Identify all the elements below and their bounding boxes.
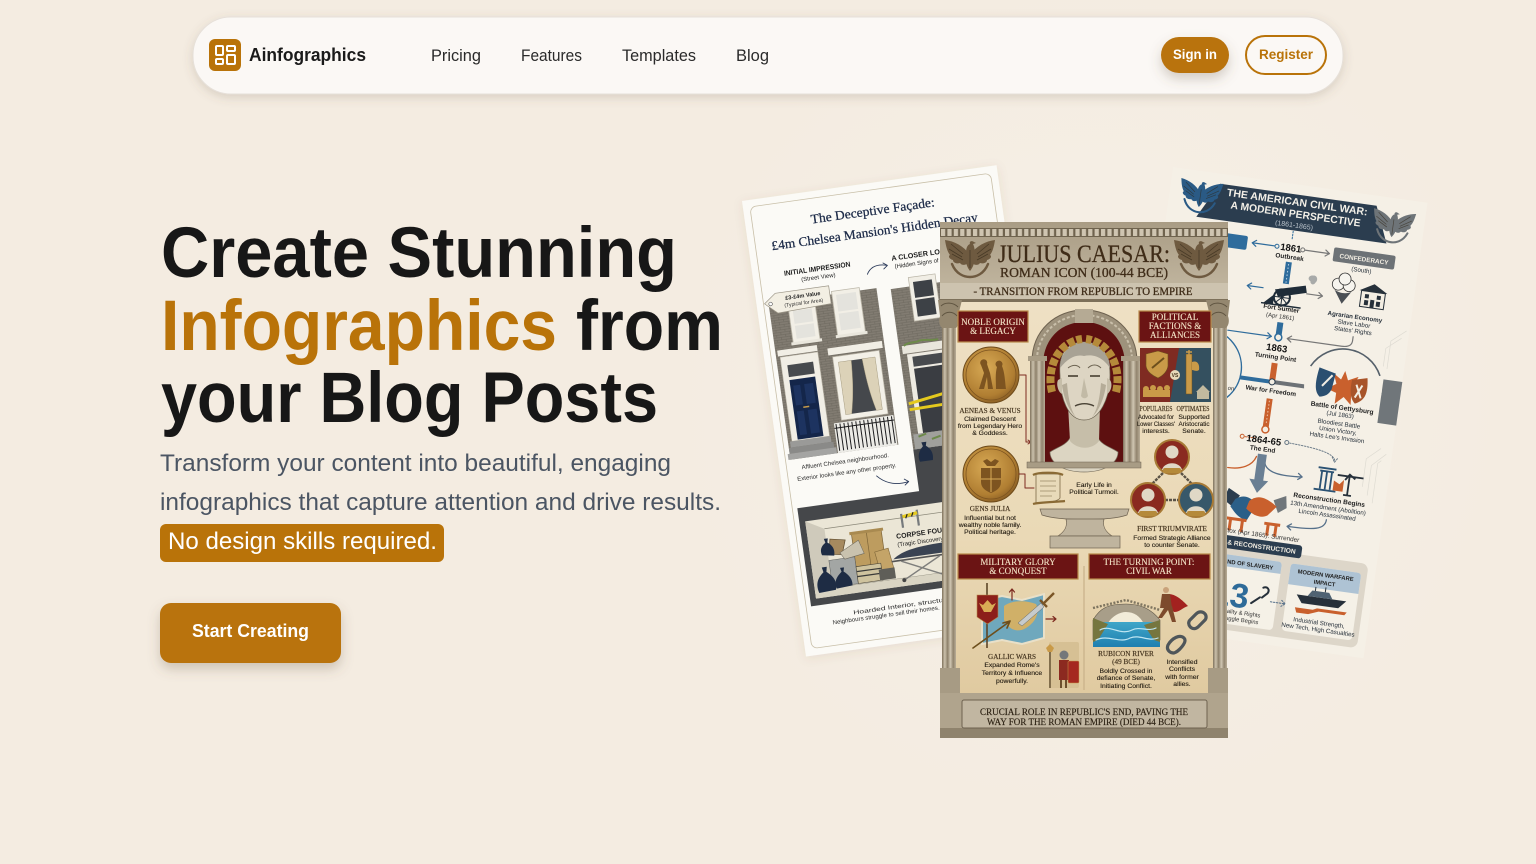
banner: reconstruction bbox=[1171, 527, 1303, 559]
battle of Gettysburg medallion: Bloodiest Battle bbox=[1317, 418, 1361, 431]
right column bbox=[1206, 300, 1230, 694]
subtitle band bbox=[940, 283, 1228, 300]
chain links bbox=[1152, 473, 1192, 500]
panel: modern warfare: Industrial Strength, bbox=[1293, 616, 1345, 630]
tray: legacy panels bbox=[1130, 532, 1369, 648]
caption: street view: Affluent Chelsea neighbourhood. bbox=[801, 453, 890, 471]
value tag: (Typical for Area) bbox=[784, 298, 824, 309]
union circle bbox=[1158, 323, 1246, 411]
panel: modern warfare: IMPACT bbox=[1313, 580, 1336, 589]
text: Gens Julia: GENS JULIA bbox=[970, 505, 1011, 513]
section label: closer look: (Hidden Signs of Decay) bbox=[894, 255, 960, 270]
main title: JULIUS CAESAR: bbox=[998, 241, 1170, 268]
hero heading bbox=[161, 214, 723, 438]
gears bbox=[1203, 260, 1223, 294]
hoarded boxes bbox=[826, 531, 896, 587]
panel: end of slavery: Equality & Rights bbox=[1216, 607, 1261, 620]
icon: mansion bbox=[1357, 282, 1389, 310]
stone footer plaque: WAY FOR THE ROMAN EMPIRE (DIED 44 BCE). bbox=[987, 717, 1181, 728]
text: Rubicon river: RUBICON RIVER bbox=[1098, 650, 1154, 658]
conquest arrows bbox=[1010, 589, 1056, 622]
confederacy box: CONFEDERACY bbox=[1339, 253, 1390, 267]
label: corpse found: CORPSE FOUND bbox=[896, 526, 953, 541]
infographic card: Chelsea mansion bbox=[742, 165, 1061, 657]
caption: street view: Exterior looks like any other property. bbox=[797, 463, 897, 483]
header: noble origin: NOBLE ORIGIN bbox=[961, 317, 1025, 327]
stretcher bbox=[890, 541, 956, 583]
hero subtitle: infographics that capture attention and drive results. bbox=[160, 489, 721, 516]
banner: title bbox=[1196, 181, 1391, 243]
text: first triumvirate: to counter Senate. bbox=[1144, 542, 1200, 549]
rubbish bags bbox=[811, 536, 853, 593]
text: optimates: Senate. bbox=[1182, 428, 1206, 435]
connector: coin to arch bbox=[1020, 375, 1031, 444]
medallion: Caesar bbox=[1131, 483, 1165, 517]
Rubicon bridge bbox=[1093, 600, 1160, 647]
text: agrarian economy: States' Rights bbox=[1334, 325, 1372, 337]
header: political factions: POLITICAL bbox=[1152, 312, 1198, 322]
caption: interior bbox=[831, 592, 986, 626]
header: political factions bbox=[1139, 311, 1211, 342]
nav links: Features bbox=[521, 47, 582, 65]
text: intensified conflicts bbox=[1164, 659, 1200, 688]
nav pill background bbox=[193, 17, 1343, 94]
stone footer plaque bbox=[940, 693, 1228, 738]
button: register: Register bbox=[1259, 47, 1314, 62]
text: optimates bbox=[1176, 405, 1210, 435]
union circle: on bbox=[1227, 386, 1234, 393]
war for freedom crossing bbox=[1198, 369, 1309, 438]
text: Gens Julia: Political heritage. bbox=[964, 529, 1016, 536]
icon: cotton plant bbox=[1330, 271, 1357, 305]
text: populares: interests. bbox=[1142, 428, 1170, 435]
stone header bbox=[940, 222, 1228, 302]
caption: interior: Hoarded Interior, structural neglect. bbox=[853, 592, 985, 616]
button: start creating: Start Creating bbox=[192, 621, 309, 641]
section label: closer look bbox=[891, 244, 960, 271]
laurel wreath bbox=[1050, 339, 1118, 392]
arrow to closer look bbox=[866, 262, 888, 274]
text: Aeneas and Venus: from Legendary Hero bbox=[958, 423, 1022, 430]
text: reconstruction begins: 13th Amendment (Abolition) bbox=[1290, 500, 1366, 517]
coin: Gens Julia bbox=[963, 446, 1019, 502]
hero heading: Create Stunning bbox=[161, 214, 677, 293]
police tape bbox=[908, 388, 962, 410]
panel: modern warfare: New Tech, High Casualties bbox=[1281, 622, 1355, 639]
stone arch with niche bbox=[1028, 309, 1142, 463]
header: political factions: FACTIONS & bbox=[1149, 321, 1201, 331]
stone footer plaque: CRUCIAL ROLE IN REPUBLIC'S END, PAVING THE bbox=[980, 708, 1188, 718]
caption: interior: Neighbours struggle to sell their homes. bbox=[832, 605, 940, 626]
text: populares bbox=[1137, 405, 1175, 435]
text: optimates: OPTIMATES bbox=[1176, 405, 1210, 413]
text: early life bbox=[1069, 482, 1119, 496]
war for freedom crossing: War for Freedom bbox=[1245, 384, 1297, 398]
nav links: Blog bbox=[736, 47, 769, 65]
text: early life: Early Life in bbox=[1076, 482, 1112, 489]
union box bbox=[1193, 229, 1248, 250]
panel: end of slavery bbox=[1170, 548, 1282, 630]
house: street view bbox=[766, 285, 898, 460]
icon: cannon bbox=[1261, 269, 1318, 310]
text: Gens Julia bbox=[958, 505, 1021, 536]
scroll bbox=[1033, 473, 1065, 504]
text: Aeneas and Venus: & Goddess. bbox=[972, 430, 1008, 437]
railing bbox=[834, 415, 897, 453]
header: noble origin bbox=[958, 311, 1028, 342]
eagle right bbox=[1174, 240, 1224, 277]
medallion: Crassus bbox=[1155, 440, 1189, 474]
section label: closer look: A CLOSER LOOK bbox=[891, 245, 952, 263]
text: Gens Julia: wealthy noble family. bbox=[958, 522, 1021, 529]
value tag: £3-£4m Value bbox=[785, 291, 821, 302]
banner: title: THE AMERICAN CIVIL WAR: bbox=[1226, 187, 1368, 218]
timeline: 1864-65: 1864-65 bbox=[1246, 433, 1283, 449]
header: turning point: THE TURNING POINT: bbox=[1104, 557, 1194, 567]
eagle left bbox=[945, 240, 995, 277]
hero subtitle bbox=[160, 450, 721, 516]
infographic card: Julius Caesar bbox=[938, 222, 1230, 738]
Caesar crossing figure bbox=[1158, 587, 1188, 622]
text: Aeneas and Venus: Claimed Descent bbox=[964, 416, 1016, 423]
label: Fort Sumter bbox=[1262, 303, 1300, 323]
text: Aeneas and Venus: AENEAS & VENUS bbox=[959, 407, 1021, 415]
text: agrarian economy bbox=[1325, 310, 1383, 339]
panel: end of slavery: Struggle Begins bbox=[1217, 615, 1259, 626]
text: intensified conflicts: allies. bbox=[1173, 681, 1191, 688]
factions image bbox=[1140, 348, 1211, 402]
coin: Aeneas and Venus bbox=[963, 347, 1019, 403]
text: populares: Lower Classes' bbox=[1137, 421, 1175, 428]
header: military glory: MILITARY GLORY bbox=[980, 557, 1056, 567]
text: Rubicon river: (49 BCE) bbox=[1112, 658, 1140, 666]
text: Gens Julia: Influential but not bbox=[964, 515, 1016, 522]
text: Gallic wars: Expanded Rome's bbox=[984, 662, 1040, 669]
text: appomattox: Appomattox (Apr 1865): Surrender bbox=[1202, 524, 1301, 544]
timeline: 1861: Outbreak bbox=[1275, 252, 1305, 263]
text: Rubicon river: defiance of Senate, bbox=[1097, 675, 1155, 682]
timeline: 1863: 1863 bbox=[1265, 342, 1288, 356]
icon: eagle gray bbox=[1370, 208, 1416, 245]
house: closer look bbox=[889, 263, 1036, 462]
circuit decoration bbox=[1360, 328, 1406, 504]
banner flag bbox=[977, 583, 998, 648]
sword and spear bbox=[973, 593, 1054, 648]
text: populares: Advocated for bbox=[1138, 414, 1175, 421]
hero heading: Infographics bbox=[161, 287, 557, 366]
card title bbox=[768, 189, 979, 253]
text: Aeneas and Venus bbox=[958, 407, 1022, 437]
card title: £4m Chelsea Mansion's Hidden Decay bbox=[770, 209, 979, 253]
text: agrarian economy: Slave Labor bbox=[1337, 318, 1371, 330]
text: Rubicon river: Boldly Crossed in bbox=[1100, 668, 1153, 675]
banner: reconstruction: WAR'S END & RECONSTRUCTION bbox=[1188, 534, 1296, 556]
text: reconstruction begins: Reconstruction Begins bbox=[1293, 492, 1366, 509]
text: first triumvirate bbox=[1133, 525, 1211, 549]
dotted arrow bbox=[1270, 599, 1286, 607]
label: corpse found bbox=[896, 526, 954, 549]
label: Fort Sumter: Fort Sumter bbox=[1263, 303, 1300, 315]
value tag bbox=[763, 286, 831, 315]
nav links: Templates bbox=[622, 47, 696, 65]
timeline: 1861 bbox=[1270, 241, 1306, 286]
text: Gallic wars: GALLIC WARS bbox=[988, 653, 1036, 661]
battle of Gettysburg medallion: Battle of Gettysburg bbox=[1310, 400, 1374, 416]
medallion: Pompey bbox=[1179, 483, 1213, 517]
header: turning point: CIVIL WAR bbox=[1126, 566, 1172, 576]
hero subtitle: Transform your content into beautiful, engaging bbox=[160, 450, 671, 477]
upper windows bbox=[785, 287, 868, 346]
icon: eagle blue bbox=[1177, 178, 1223, 215]
text: Rubicon river bbox=[1097, 650, 1155, 690]
confederacy box: (South) bbox=[1351, 266, 1372, 276]
stanchion barrier bbox=[901, 510, 919, 528]
timeline: 1863 bbox=[1252, 320, 1302, 384]
front door bbox=[777, 345, 830, 442]
map of Gaul bbox=[982, 594, 1044, 644]
timeline: 1863: Turning Point bbox=[1254, 351, 1297, 364]
factions image: VS bbox=[1172, 373, 1179, 379]
infographic card: American Civil War bbox=[1109, 167, 1427, 658]
text: first triumvirate: Formed Strategic Alliance bbox=[1133, 535, 1211, 542]
battle of Gettysburg medallion bbox=[1297, 343, 1387, 447]
text: populares: POPULARES bbox=[1140, 405, 1173, 413]
text: Gallic wars: Territory & Influence bbox=[982, 670, 1042, 677]
header: military glory: & CONQUEST bbox=[989, 566, 1047, 576]
text: intensified conflicts: Conflicts bbox=[1169, 666, 1196, 673]
icon: handshake bbox=[1219, 487, 1288, 538]
panel: modern warfare bbox=[1281, 563, 1363, 641]
marble bust of Caesar bbox=[1050, 339, 1118, 472]
arrow to interior bbox=[877, 472, 909, 489]
battle of Gettysburg medallion: Halts Lee's Invasion bbox=[1309, 431, 1365, 445]
text: intensified conflicts: with former bbox=[1164, 674, 1200, 681]
panel: end of slavery: 13 bbox=[1209, 574, 1251, 617]
panel: end of slavery: END OF SLAVERY bbox=[1223, 559, 1274, 572]
interior scene bbox=[805, 488, 1053, 599]
hero heading: from bbox=[576, 287, 723, 366]
highlighted tagline: No design skills required. bbox=[168, 528, 437, 555]
battle of Gettysburg medallion: (Jul 1863) bbox=[1326, 410, 1354, 421]
highlighted tagline bbox=[160, 524, 444, 562]
text: Gallic wars bbox=[982, 653, 1042, 685]
button: sign in: Sign in bbox=[1173, 47, 1217, 62]
main title: - TRANSITION FROM REPUBLIC TO EMPIRE bbox=[974, 286, 1192, 298]
arch base bbox=[1027, 462, 1141, 468]
entrance steps bbox=[786, 435, 837, 460]
bay window with curtains bbox=[827, 341, 892, 421]
card title: The Deceptive Façade: bbox=[810, 194, 936, 227]
parchment bbox=[955, 302, 1213, 694]
timeline: 1864-65 bbox=[1233, 432, 1289, 496]
panel: modern warfare: MODERN WARFARE bbox=[1297, 569, 1354, 583]
header: turning point bbox=[1089, 554, 1210, 579]
header: military glory bbox=[958, 554, 1078, 579]
navigation bar bbox=[193, 17, 1343, 94]
label: Fort Sumter: (Apr 1861) bbox=[1266, 312, 1295, 322]
text: Rubicon river: Initiating Conflict. bbox=[1100, 683, 1152, 690]
main title: ROMAN ICON (100-44 BCE) bbox=[1000, 266, 1168, 281]
nav links bbox=[431, 47, 769, 65]
main title bbox=[974, 241, 1192, 298]
section label: initial impression bbox=[783, 260, 852, 286]
timeline: 1864-65: The End bbox=[1249, 444, 1276, 455]
section label: initial impression: (Street View) bbox=[801, 273, 836, 283]
confederacy box bbox=[1331, 247, 1396, 279]
wardrobe bbox=[849, 528, 889, 578]
rubbish bag bbox=[917, 441, 934, 462]
banner: title: (1861-1865) bbox=[1275, 220, 1313, 232]
hero heading: your Blog Posts bbox=[161, 359, 658, 438]
section label: initial impression: INITIAL IMPRESSION bbox=[783, 260, 851, 278]
header: political factions: ALLIANCES bbox=[1150, 330, 1200, 340]
brand name: Ainfographics bbox=[249, 45, 366, 65]
battle of Gettysburg medallion: Union Victory, bbox=[1319, 425, 1357, 437]
header: noble origin: & LEGACY bbox=[970, 326, 1016, 336]
text: early life: Political Turmoil. bbox=[1069, 489, 1119, 496]
pedestal bbox=[1040, 509, 1129, 548]
icon: reconstruction bbox=[1313, 467, 1364, 497]
broken chain bbox=[1167, 612, 1206, 653]
text: intensified conflicts: Intensified bbox=[1167, 659, 1198, 666]
button: start creating bbox=[160, 603, 341, 663]
left column bbox=[938, 300, 962, 694]
nav links: Pricing bbox=[431, 47, 481, 65]
text: reconstruction begins: Lincoln Assassinated bbox=[1298, 508, 1357, 523]
text: Gallic wars: powerfully. bbox=[996, 678, 1028, 685]
text: agrarian economy: Agrarian Economy bbox=[1327, 310, 1383, 325]
dark interior frame bbox=[791, 433, 1054, 606]
banner: title: A MODERN PERSPECTIVE bbox=[1230, 199, 1361, 230]
button: sign in bbox=[1161, 37, 1229, 73]
label: corpse found: (Tragic Discovery) bbox=[897, 536, 946, 549]
text: reconstruction begins bbox=[1289, 492, 1367, 524]
text: optimates: Aristocratic bbox=[1178, 421, 1210, 428]
connector: coin to scroll bbox=[1019, 474, 1034, 488]
section divider bbox=[1083, 566, 1085, 690]
timeline: 1861: 1861 bbox=[1280, 242, 1303, 256]
icon: logo bbox=[209, 39, 241, 71]
legionary card bbox=[1046, 642, 1079, 688]
caption: street view bbox=[795, 452, 897, 483]
timeline arrows bbox=[1197, 224, 1375, 570]
gray corner block bbox=[1377, 379, 1402, 426]
button: register bbox=[1246, 36, 1326, 74]
text: first triumvirate: FIRST TRIUMVIRATE bbox=[1137, 525, 1208, 533]
text: optimates: Supported bbox=[1178, 414, 1210, 421]
